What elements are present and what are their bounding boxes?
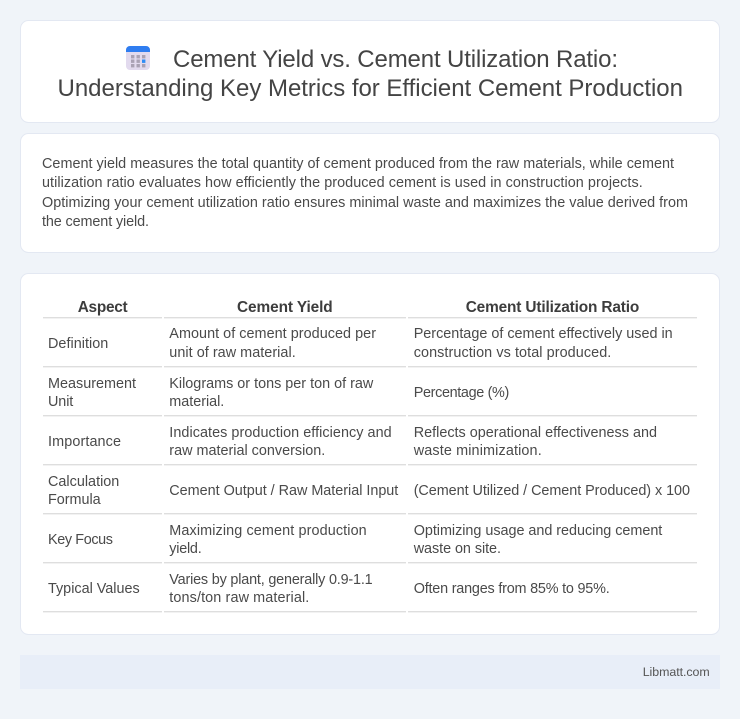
row: Key Focus: yield.	[169, 541, 202, 557]
row: Typical Values	[43, 572, 697, 612]
row: Typical Values: Varies by plant, generally 0.9-1.1	[169, 572, 373, 588]
row: Typical Values: Often ranges from 85% to 95%.	[414, 581, 610, 597]
row: Calculation Formula: (Cement Utilized / Cement Produced) x 100	[414, 483, 690, 499]
row: Key Focus: Key Focus	[48, 532, 113, 548]
footer bar: Libmatt.com	[643, 665, 710, 679]
row: Definition: unit of raw material.	[169, 345, 296, 361]
intro paragraph	[42, 156, 688, 230]
row: Key Focus: waste on site.	[413, 541, 501, 557]
intro paragraph: Cement yield measures the total quantity of cement produced from the raw materials, while cement	[42, 156, 674, 172]
footer bar	[20, 655, 720, 689]
row: Calculation Formula: Calculation	[48, 474, 119, 490]
row: Definition: Definition	[48, 336, 108, 352]
table header row	[43, 299, 697, 318]
row: Measurement Unit: Unit	[48, 394, 73, 410]
title	[58, 46, 683, 102]
row: Definition: construction vs total produced.	[414, 345, 611, 361]
title: Understanding Key Metrics for Efficient Cement Production	[58, 75, 683, 102]
row: Measurement Unit: material.	[169, 394, 224, 410]
row: Measurement Unit: Measurement	[48, 376, 136, 392]
table header row: Cement Yield	[237, 299, 333, 316]
table header row: Aspect	[78, 299, 128, 316]
row: Definition: Amount of cement produced per	[169, 326, 376, 342]
panel: comparison table	[20, 274, 720, 634]
table header row: Cement Utilization Ratio	[466, 299, 639, 316]
row: Definition	[43, 326, 697, 367]
row: Key Focus: Maximizing cement production	[169, 523, 367, 539]
intro paragraph: the cement yield.	[42, 214, 149, 230]
intro paragraph: utilization ratio evaluates how efficiently the produced cement is used in construction projects.	[42, 175, 643, 191]
row: Importance: Reflects operational effectiveness and	[414, 425, 657, 441]
row: Importance: Indicates production efficiency and	[169, 425, 392, 441]
row: Measurement Unit: Kilograms or tons per ton of raw	[169, 376, 374, 392]
panel: introduction	[20, 134, 720, 252]
row: Importance: waste minimization.	[413, 443, 542, 459]
intro paragraph: Optimizing your cement utilization ratio ensures minimal waste and maximizes the value derived from	[42, 195, 688, 211]
row: Key Focus	[43, 523, 697, 563]
title: Cement Yield vs. Cement Utilization Ratio:	[173, 46, 618, 73]
row: Typical Values: tons/ton raw material.	[169, 590, 309, 606]
row: Measurement Unit	[43, 376, 697, 416]
icon: calendar	[126, 46, 150, 70]
row: Calculation Formula	[43, 474, 697, 514]
row: Importance: Importance	[48, 434, 121, 450]
row: Calculation Formula: Formula	[48, 492, 101, 508]
panel: title header	[20, 20, 720, 122]
row: Typical Values: Typical Values	[48, 581, 140, 597]
row: Calculation Formula: Cement Output / Raw Material Input	[169, 483, 398, 499]
row: Measurement Unit: Percentage (%)	[414, 385, 509, 401]
row: Importance	[43, 425, 697, 465]
row: Key Focus: Optimizing usage and reducing cement	[414, 523, 662, 539]
row: Definition: Percentage of cement effectively used in	[414, 326, 673, 342]
row: Importance: raw material conversion.	[169, 443, 325, 459]
